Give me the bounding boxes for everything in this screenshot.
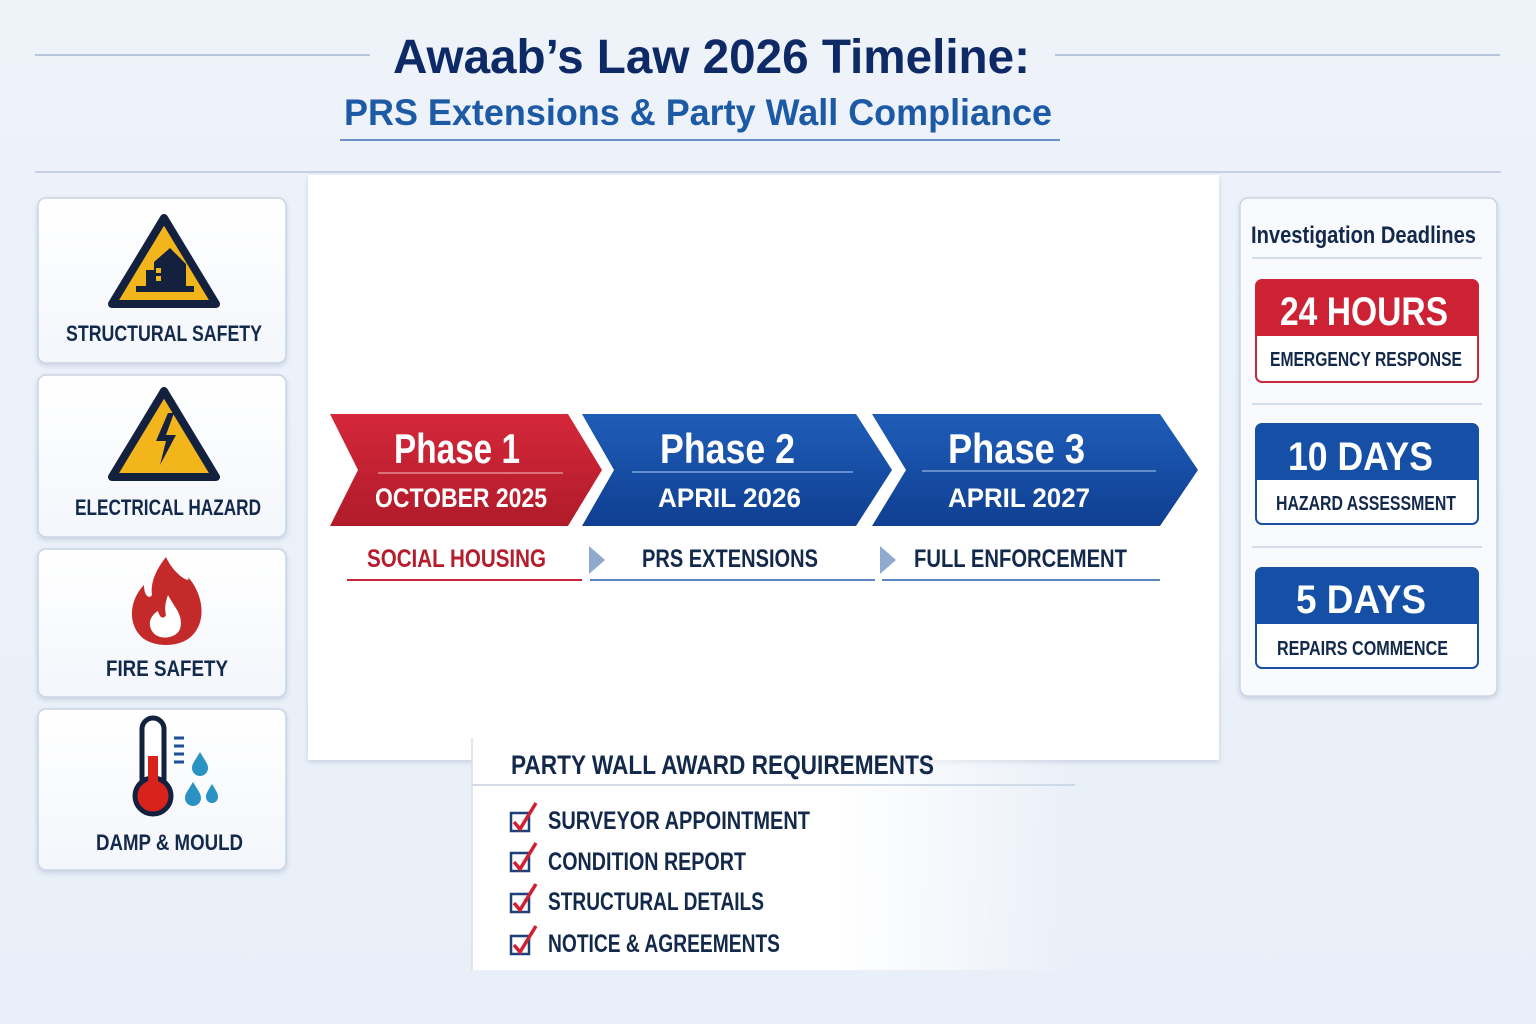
card: electrical hazard [38, 375, 286, 537]
card: electrical hazard: ELECTRICAL HAZARD [75, 495, 261, 520]
deadline: 10 days [1256, 424, 1478, 524]
deadline: 5 days: 5 DAYS [1296, 578, 1426, 622]
phase 1 chevron: Phase 1 [394, 425, 520, 472]
panel: investigation deadlines [1240, 198, 1497, 696]
title: Awaab’s Law 2026 Timeline: [393, 31, 1030, 84]
phase 2 chevron: APRIL 2026 [658, 483, 801, 513]
phase 1 chevron [330, 414, 602, 526]
deadline: 10 days: HAZARD ASSESSMENT [1276, 493, 1456, 515]
card: damp & mould: DAMP & MOULD [96, 830, 243, 855]
phase 2 chevron: Phase 2 [660, 425, 795, 472]
card: structural safety: STRUCTURAL SAFETY [66, 321, 262, 346]
phase labels: FULL ENFORCEMENT [914, 545, 1127, 573]
deadline: 24 hours [1256, 280, 1478, 382]
phase labels: SOCIAL HOUSING [367, 545, 546, 573]
phase 3 chevron: APRIL 2027 [948, 483, 1090, 513]
phase labels [347, 545, 1160, 580]
panel: central white [308, 175, 1219, 760]
phase 3 chevron: Phase 3 [948, 425, 1085, 472]
checklist: NOTICE & AGREEMENTS [548, 930, 780, 958]
panel: investigation deadlines: Investigation Deadlines [1251, 222, 1476, 249]
panel: party wall award requirements [472, 738, 1075, 970]
subtitle: PRS Extensions & Party Wall Compliance [344, 92, 1052, 133]
deadline: 5 days [1256, 568, 1478, 668]
checklist [511, 803, 810, 958]
card: damp & mould [38, 709, 286, 870]
card: fire safety [38, 549, 286, 697]
deadline: 24 hours: EMERGENCY RESPONSE [1270, 349, 1462, 371]
checklist: SURVEYOR APPOINTMENT [548, 807, 810, 835]
phase 3 chevron [872, 414, 1198, 526]
card: fire safety: FIRE SAFETY [106, 656, 228, 681]
phase 2 chevron [582, 414, 892, 526]
phase labels: PRS EXTENSIONS [642, 545, 818, 573]
checklist: CONDITION REPORT [548, 848, 746, 876]
phase 1 chevron: OCTOBER 2025 [375, 483, 547, 513]
card: structural safety [38, 198, 286, 363]
deadline: 5 days: REPAIRS COMMENCE [1277, 638, 1448, 660]
deadline: 24 hours: 24 HOURS [1280, 290, 1448, 334]
panel: party wall award requirements: PARTY WALL AWARD REQUIREMENTS [511, 750, 934, 780]
deadline: 10 days: 10 DAYS [1288, 435, 1433, 479]
checklist: STRUCTURAL DETAILS [548, 888, 764, 916]
